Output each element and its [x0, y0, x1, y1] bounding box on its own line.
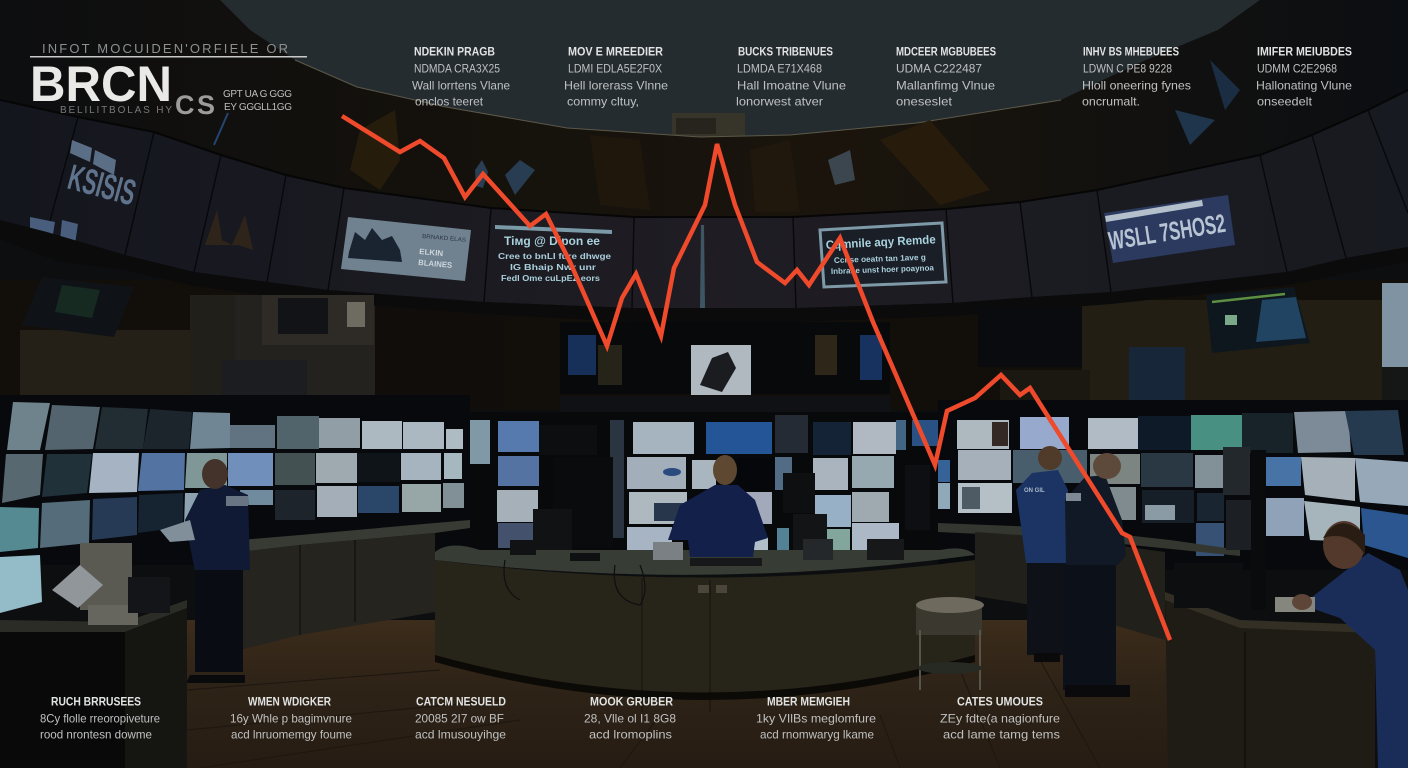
- screen: vertical strip: [700, 225, 705, 308]
- top column 2: Hell lorerass Vlnne: [564, 78, 668, 92]
- screen: boxed slide: Cqmnile aqy Remde: [825, 232, 936, 252]
- title block: [30, 41, 307, 120]
- screen: text slide: [495, 225, 612, 283]
- top column 3: lonorwest atver: [736, 94, 823, 108]
- bottom column 4: 28, Vlle ol I1 8G8: [584, 712, 676, 726]
- screen: boxed slide: Inbrane unst hoer poaynoa: [831, 263, 935, 276]
- bottom column 1: RUCH BRRUSEES: [51, 694, 141, 708]
- top column 1: NDMDA CRA3X25: [414, 62, 500, 76]
- bottom column 2: [230, 694, 352, 742]
- wall screen right: [1382, 283, 1408, 367]
- screen: text slide: Cree to bnLI fure dhwge: [498, 252, 612, 261]
- top column 3: [736, 44, 846, 108]
- central desk: [435, 545, 975, 712]
- seated operator: [1275, 521, 1408, 768]
- top column 4: oneseslet: [896, 94, 953, 108]
- bottom column 1: 8Cy flolle rreoropiveture: [40, 712, 160, 726]
- operator left: [160, 459, 250, 683]
- desk equipment: [510, 539, 904, 566]
- hanging monitor left: [22, 277, 134, 337]
- bottom column 6: [940, 694, 1060, 742]
- top column 6: Hallonating Vlune: [1256, 78, 1352, 92]
- top column 5: INHV BS MHEBUEES: [1083, 44, 1179, 58]
- bottom column 5: acd rnomwaryg lkame: [760, 728, 874, 742]
- bottom column 3: [415, 694, 506, 742]
- top column 4: UDMA C222487: [896, 62, 982, 76]
- top column 3: BUCKS TRIBENUES: [738, 44, 833, 58]
- desk right back: [938, 523, 1240, 640]
- screen: KSISIS: [30, 140, 140, 244]
- top column 6: [1256, 44, 1352, 108]
- top column 5: LDWN C PE8 9228: [1083, 62, 1172, 76]
- top column 6: IMIFER MEIUBDES: [1257, 44, 1352, 58]
- screen: WSLL 7SHOS2: WSLL 7SHOS2: [1106, 208, 1227, 256]
- title block: INFOT MOCUIDEN'ORFIELE OR: [42, 41, 288, 56]
- monitor wall right: [938, 400, 1408, 570]
- soffit under screens: [0, 220, 1408, 322]
- top column 1: Wall lorrtens Vlane: [412, 78, 510, 92]
- bottom column 6: CATES UMOUES: [957, 694, 1043, 708]
- screen: boxed slide: Ccnse oeatn tan 1ave g: [834, 253, 926, 265]
- screen: photo slide: BRNAKD ELAS: [422, 234, 466, 244]
- right desk: [1165, 563, 1375, 768]
- bottom column 2: acd lnruomemgy foume: [231, 728, 352, 742]
- bottom column 3: CATCM NESUELD: [416, 694, 506, 708]
- screen: WSLL 7SHOS2: [1104, 195, 1235, 263]
- screen: text slide: Fedl Ome cuLpEZ eors: [501, 274, 601, 283]
- top column 1: [412, 44, 510, 108]
- bottom column 4: [584, 694, 676, 742]
- left desk with printer: [0, 543, 187, 768]
- monitor wall center: [470, 412, 940, 560]
- title block: CS: [175, 90, 215, 120]
- center upper monitor stack: [560, 322, 890, 420]
- bottom column 5: [756, 694, 876, 742]
- wood floor: [187, 620, 1170, 768]
- top column 1: NDEKIN PRAGB: [414, 44, 495, 58]
- monitor stand: [1223, 447, 1266, 610]
- top column 1: onclos teeret: [415, 94, 484, 108]
- bottom column 2: WMEN WDIGKER: [248, 694, 331, 708]
- hanging monitor right: [1206, 287, 1310, 353]
- top column 2: LDMI EDLA5E2F0X: [568, 62, 662, 76]
- operator center: [668, 455, 768, 557]
- red decline line: [342, 116, 1170, 640]
- top column 4: Mallanfimg Vlnue: [896, 78, 995, 92]
- bottom column 3: 20085 2I7 ow BF: [415, 712, 504, 726]
- bottom column 4: MOOK GRUBER: [590, 694, 673, 708]
- screen: photo slide: [341, 217, 471, 281]
- bottom column 3: acd lmusouyihge: [415, 728, 506, 742]
- screen: KSISIS: KSISIS: [64, 156, 140, 213]
- top column 5: [1082, 44, 1191, 108]
- bottom column 2: 16y Whle p bagimvnure: [230, 712, 352, 726]
- title block: GPT UA G GGG: [223, 89, 292, 100]
- bottom column 6: ZEy fdte(a nagionfure: [940, 712, 1060, 726]
- bottom column 5: 1ky VIlBs meglomfure: [756, 712, 876, 726]
- top column 3: LDMDA E71X468: [737, 62, 822, 76]
- ceiling slate: [220, 0, 1260, 137]
- title block: BELILITBOLAS HY: [60, 105, 172, 116]
- top column 2: [564, 44, 668, 108]
- bottom column 6: acd lame tamg tems: [943, 728, 1060, 742]
- bottom column 1: rood nrontesn dowme: [40, 728, 152, 742]
- ceiling unit: [672, 113, 745, 137]
- top column 2: MOV E MREEDIER: [568, 44, 663, 58]
- screen: text slide: Tiмg @ Dipon ee: [504, 234, 600, 248]
- large dark monitor: [978, 307, 1082, 367]
- screen: photo slide: BLAINES: [418, 258, 453, 270]
- operator pair: [1016, 446, 1130, 697]
- top column 5: Hloll oneering fynes: [1082, 78, 1191, 92]
- monitor wall left: [0, 395, 470, 613]
- title block: EY GGGLL1GG: [224, 102, 292, 113]
- bottom column 4: acd lromoplins: [589, 728, 672, 742]
- title block: BRCN: [30, 56, 172, 112]
- desk left back: [240, 520, 470, 650]
- top column 5: oncrumalt.: [1082, 94, 1140, 108]
- top column 3: Hall Imoatne Vlune: [737, 78, 846, 92]
- bottom column 5: MBER MEMGIEH: [767, 694, 850, 708]
- screen: text slide: IG Bhaip Nwr unr: [510, 263, 596, 272]
- bottom column 1: [40, 694, 160, 742]
- top column 6: UDMM C2E2968: [1257, 62, 1337, 76]
- screen: orange shapes: [205, 210, 253, 250]
- operator pair: ON GIL: [1024, 488, 1045, 494]
- wall notice board: [262, 295, 374, 345]
- top column 4: MDCEER MGBUBEES: [896, 44, 996, 58]
- top column 2: commy cltuy,: [567, 94, 639, 108]
- curved wall screens: [0, 90, 1408, 308]
- reflective upper band: [0, 0, 1408, 217]
- blue door: [1129, 347, 1185, 417]
- top column 6: onseedelt: [1257, 94, 1313, 108]
- supply cart: [916, 597, 984, 690]
- screen: photo slide: ELKIN: [419, 247, 444, 258]
- screen: boxed slide: [820, 223, 946, 287]
- top column 4: [896, 44, 996, 108]
